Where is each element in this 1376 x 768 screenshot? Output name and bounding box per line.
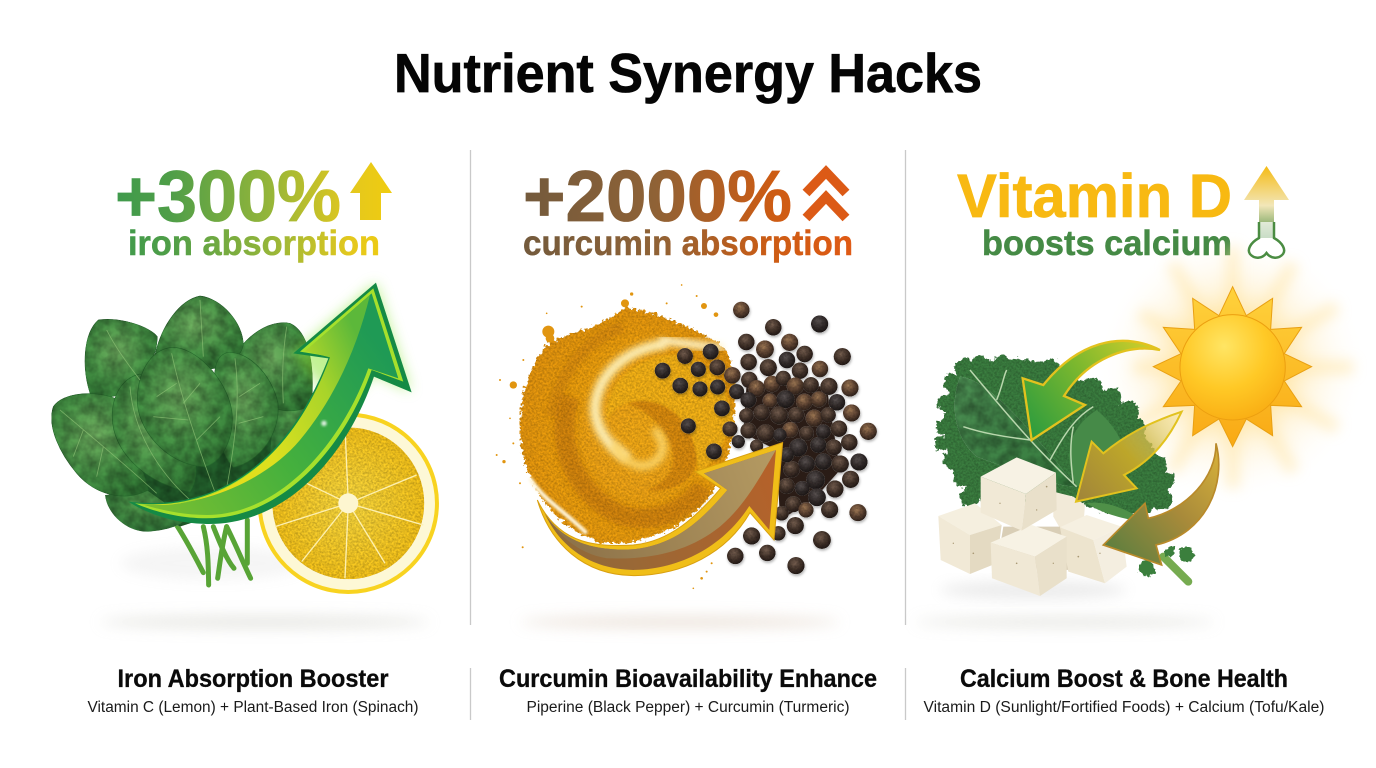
black peppercorns xyxy=(655,302,877,574)
icon: arrow rising from bone xyxy=(1244,166,1289,258)
stat label: iron absorption: iron absorption xyxy=(128,224,380,263)
turmeric powder mound xyxy=(496,284,735,589)
panel caption xyxy=(499,665,877,716)
arrow from sun, golden xyxy=(1076,412,1182,502)
panel caption xyxy=(88,665,418,716)
stat headline: +2000%: +2000% xyxy=(523,157,792,237)
arrow from sun, brown and green xyxy=(1103,443,1219,565)
caption heading: Calcium Boost & Bone Health xyxy=(960,665,1288,693)
panel: iron absorption xyxy=(52,157,439,716)
title: Nutrient Synergy Hacks xyxy=(394,42,982,104)
illustration: sun, kale, tofu and arrows xyxy=(934,247,1353,599)
bioavailability arrow xyxy=(537,443,783,576)
sun rays xyxy=(1129,247,1353,488)
caption heading: Curcumin Bioavailability Enhance xyxy=(499,665,877,693)
panel: vitamin D and calcium xyxy=(915,162,1367,716)
icon: double chevron up xyxy=(806,172,846,218)
kale leaf xyxy=(934,355,1195,582)
icon: up arrow xyxy=(350,162,392,220)
illustration: spinach, lemon and arrow xyxy=(52,283,439,594)
illustration: turmeric, pepper and arrow xyxy=(496,284,877,589)
leaf veins xyxy=(60,300,287,500)
spinach stems xyxy=(173,520,251,585)
caption subtext: Piperine (Black Pepper) + Curcumin (Turmeric) xyxy=(526,699,850,716)
stat headline: +300%: +300% xyxy=(115,157,341,237)
sun xyxy=(1153,287,1312,447)
stat headline: Vitamin D: Vitamin D xyxy=(957,162,1232,230)
ground shadow xyxy=(915,617,1215,627)
stat label: boosts calcium: boosts calcium xyxy=(982,224,1232,263)
lemon slice xyxy=(258,413,439,594)
caption subtext: Vitamin C (Lemon) + Plant-Based Iron (Spinach) xyxy=(88,699,418,716)
caption subtext: Vitamin D (Sunlight/Fortified Foods) + Calcium (Tofu/Kale) xyxy=(924,699,1324,716)
panel caption xyxy=(924,665,1324,716)
sun glow xyxy=(1097,232,1367,502)
tofu cubes xyxy=(938,457,1127,599)
stat label: curcumin absorption: curcumin absorption xyxy=(523,224,853,263)
ground shadow xyxy=(100,616,430,628)
growth arrow xyxy=(128,283,412,524)
arrow from sun, green xyxy=(1023,341,1160,440)
caption heading: Iron Absorption Booster xyxy=(118,665,389,693)
arrow glow xyxy=(293,283,411,410)
ground shadow xyxy=(520,616,840,628)
spinach leaves xyxy=(52,296,314,532)
panel: curcumin absorption xyxy=(496,157,877,716)
